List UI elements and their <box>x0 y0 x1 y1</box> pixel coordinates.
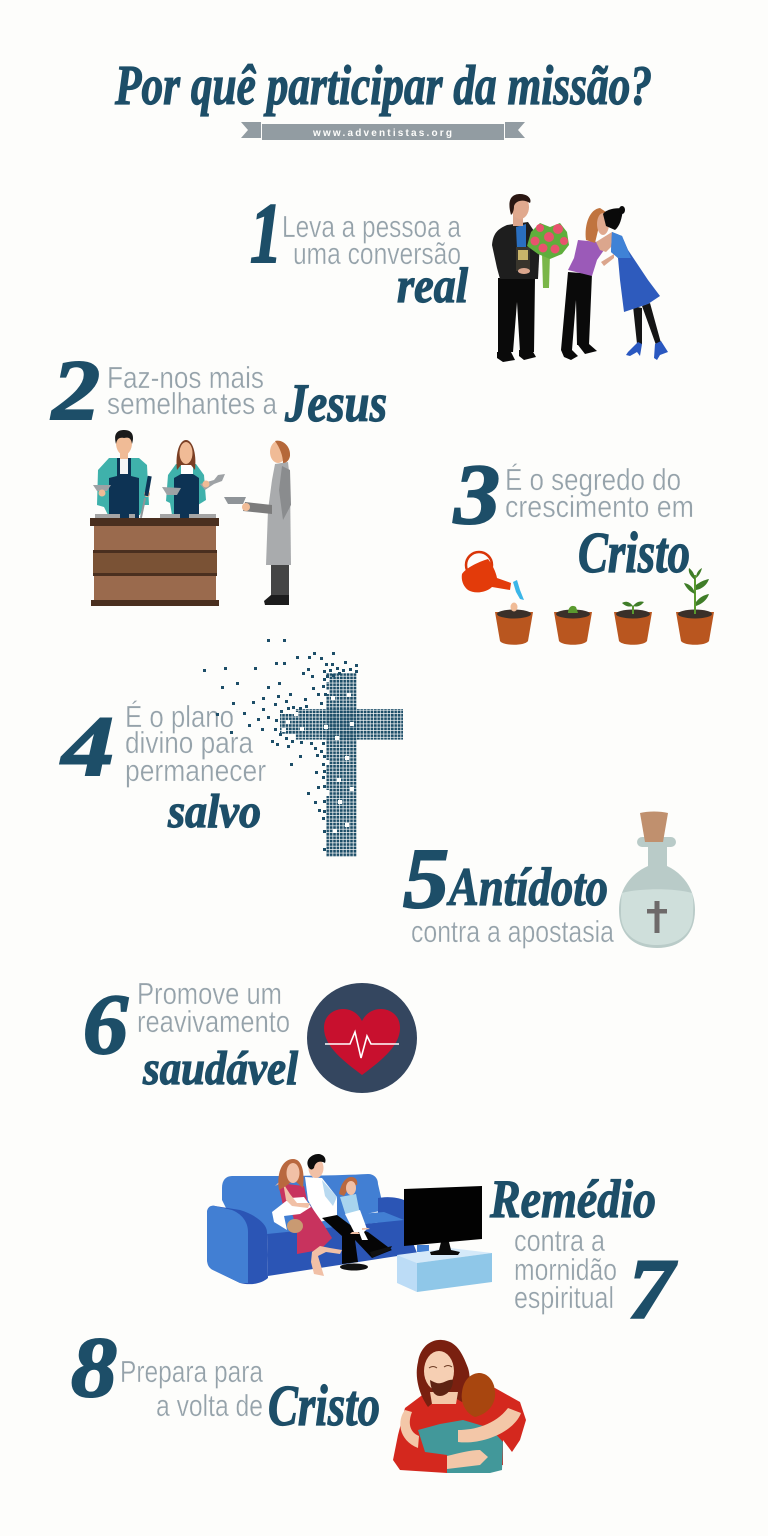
item 8: text: a volta de <box>156 1388 263 1423</box>
item 4: text: divino para <box>125 725 254 760</box>
server woman <box>162 440 225 518</box>
bouquet of flowers <box>527 223 569 288</box>
woman in blue <box>601 206 668 360</box>
item 3: text: Cristo <box>578 520 690 585</box>
item 7: text: 7 <box>628 1241 677 1337</box>
item 3: text: crescimento em <box>505 489 694 524</box>
item 1: text: uma conversão <box>293 236 461 271</box>
item 7: text: espiritual <box>514 1280 614 1315</box>
item 6: text: reavivamento <box>137 1004 290 1039</box>
icon: watering can and growing plants <box>462 552 714 645</box>
pot 2 <box>554 606 592 645</box>
woman in purple <box>561 208 620 360</box>
item 6: text: 6 <box>83 976 128 1072</box>
customer with bowl <box>224 441 291 605</box>
item 5: text: 5 <box>403 830 449 926</box>
item 2: text: 2 <box>50 342 100 438</box>
item 4: text <box>60 698 266 838</box>
television <box>404 1186 482 1255</box>
boy <box>418 1373 503 1473</box>
man <box>492 194 540 362</box>
item 1: text: real <box>397 257 468 313</box>
item 7: text <box>489 1169 677 1337</box>
item 8: text: Cristo <box>268 1373 380 1438</box>
mother with baby <box>272 1159 342 1276</box>
item 4: text: permanecer <box>125 753 266 788</box>
pot 1 <box>495 602 533 645</box>
item 8: text <box>71 1319 380 1438</box>
item 7: text: contra a <box>514 1223 606 1258</box>
item 6: text: Promove um <box>137 976 282 1011</box>
icon: family on sofa watching television <box>207 1154 492 1292</box>
item 2: text: Faz-nos mais <box>107 360 264 395</box>
item 7: text: mornidão <box>514 1252 617 1287</box>
banner: www.adventistas.org: www.adventistas.org <box>312 128 452 139</box>
item 2: text: Jesus <box>284 373 387 433</box>
sofa <box>207 1174 417 1284</box>
item 3: text: 3 <box>453 446 500 542</box>
child <box>339 1177 370 1240</box>
item 2: text <box>50 342 387 438</box>
item 6: text: saudável <box>142 1042 299 1095</box>
icon: people serving food at counter <box>90 430 291 606</box>
father <box>305 1154 392 1270</box>
item 2: text: semelhantes a <box>107 386 278 421</box>
item 4: text: salvo <box>167 785 261 838</box>
watering can <box>462 552 524 600</box>
item 8: text: Prepara para <box>120 1354 264 1389</box>
item 1: text: Leva a pessoa a <box>282 209 462 244</box>
hugging arms <box>400 1408 521 1469</box>
icon: heart with heartbeat in circle <box>307 983 417 1093</box>
pot 4 <box>676 568 714 645</box>
icon: Jesus hugging a boy <box>393 1340 526 1473</box>
item 5: text: contra a apostasia <box>411 914 615 949</box>
item 4: text: É o plano <box>125 699 234 734</box>
tv stand <box>397 1245 492 1292</box>
item 3: text <box>453 446 694 585</box>
item 1: text <box>250 185 468 313</box>
item 1: text: 1 <box>250 185 282 281</box>
Jesus robe <box>393 1388 526 1473</box>
Jesus head and hair <box>417 1340 470 1407</box>
item 7: text: Remédio <box>489 1169 656 1229</box>
item 5: text: Antídoto <box>447 857 608 917</box>
banner: www.adventistas.org <box>241 122 525 140</box>
item 4: text: 4 <box>60 698 114 794</box>
server man <box>93 430 152 518</box>
item 3: text: É o segredo do <box>505 462 681 497</box>
icon: man with flowers and two women hugging <box>492 194 668 362</box>
counter <box>90 513 219 606</box>
pot 3 <box>614 601 652 645</box>
item 5: text <box>403 830 615 949</box>
item 8: text: 8 <box>71 1319 117 1415</box>
icon: cross dissolving into dots <box>203 639 403 857</box>
item 6: text <box>83 976 299 1095</box>
icon: antidote bottle with cross <box>619 812 695 948</box>
